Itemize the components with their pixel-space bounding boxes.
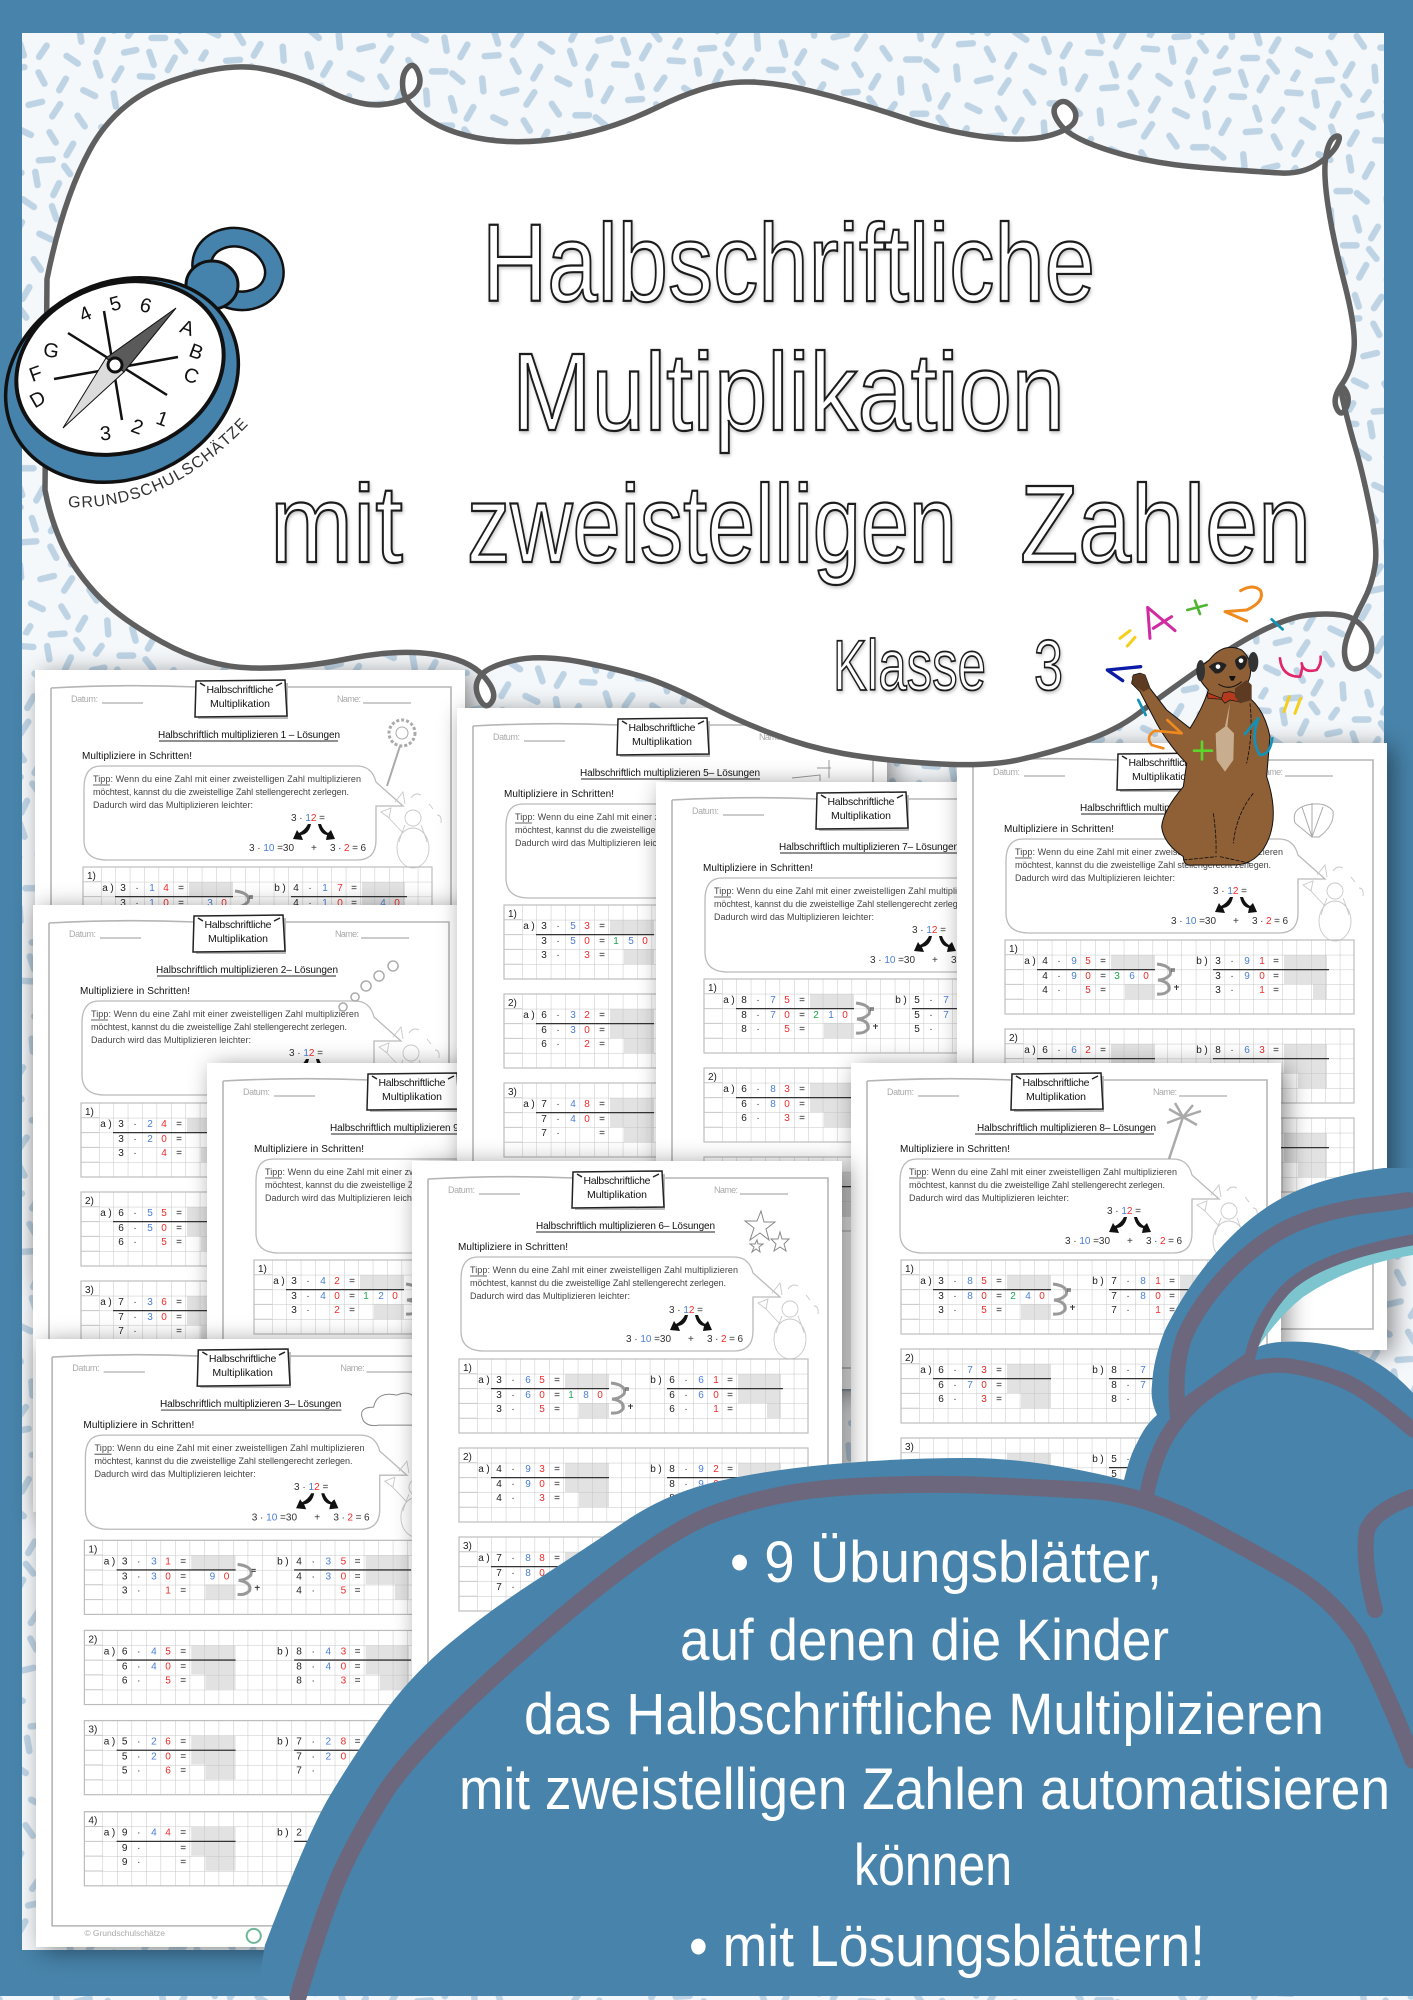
worksheet 6 title and tip text: Tipp: Wenn du eine Zahl mit einer zweistelligen Zahl multiplizieren [470,1265,738,1275]
worksheet 6 title and tip text: Halbschriftlich multiplizieren 6– Lösungen [536,1221,715,1232]
exercise block 1: a)3· 5 3 = [523,921,605,932]
worksheet 2 title and tip text [69,919,359,1059]
worksheet 6 title and tip text: Dadurch wird das Multiplizieren leichter: [470,1291,630,1301]
worksheet 3 title and tip text: Name: [340,1363,365,1373]
worksheet 6 title and tip text: + [688,1334,694,1345]
exercise block 1: a)3· 3 1 =b)4· 3 5 = [104,1556,361,1567]
worksheet 2 title and tip text: Tipp: Wenn du eine Zahl mit einer zweistelligen Zahl multiplizieren [91,1009,359,1019]
white title blob with hand-drawn grey frame [45,65,1376,765]
compass dial letters and numbers: A [177,316,198,341]
exercise block 2: 6· 7 0 =8· 7 [938,1380,1146,1391]
exercise block 1: 3· 3 = [541,950,605,961]
exercise block 3 [504,1083,853,1157]
exercise block 2 [459,1448,808,1522]
worksheet 7 title and tip text: möchtest, kannst du die zweistellige Zahl stellengerecht zerlegen. [714,899,970,909]
exercise block 1: 1) [258,1264,267,1275]
worksheet 1 title and tip text: Datum: [71,694,98,704]
exercise block 3: a)7· 8 8 = [478,1553,560,1564]
worksheet 3 title and tip text: 3 · 2 = 6 [333,1512,370,1523]
exercise block 3 [704,1157,1053,1231]
exercise block 1: 1) [87,871,96,882]
exercise block 2 [504,994,853,1068]
exercise block 2: 6· 3 =8· [938,1394,1130,1405]
worksheet 1 title and tip text: 3 · 10 =30 [249,843,294,854]
worksheet 9 title and tip text: Multiplikation [382,1091,442,1103]
worksheet 2 title and tip text: Datum: [69,929,96,939]
banner text: • 9 Übungsblätter, [730,1530,1162,1595]
exercise block 3: 7· 8 0 [496,1568,545,1579]
exercise block 1: 3· 4 = [118,1148,182,1159]
worksheet page 3 [36,1339,469,1947]
worksheet 7 title and tip text: Dadurch wird das Multiplizieren leichter: [714,912,874,922]
exercise block 2: 6· 5 = [118,1237,182,1248]
compass dial letters and numbers: 2 [128,415,146,440]
worksheet 9 title and tip text: Dadurch wird das Multiplizieren leichter: [265,1193,425,1203]
exercise block 1: 3· 8 0 = 2 4 0 7· 8 0 = [938,1291,1175,1302]
worksheet 7 title and tip text: Tipp: Wenn du eine Zahl mit einer zweistelligen Zahl multiplizieren [714,886,982,896]
exercise block 3: 3) [88,1725,97,1736]
worksheet 9 title and tip text [243,1077,533,1203]
decoration: stars [745,1211,789,1252]
worksheet 4 title and tip text: Multiplikation [1132,771,1192,783]
exercise block 1 [84,1540,436,1614]
worksheet 4 title and tip text: + [1233,916,1239,927]
worksheet 8 title and tip text: Multipliziere in Schritten! [900,1144,1010,1155]
exercise block 3: 7· 4 0 = [541,1114,605,1125]
worksheet 6 title and tip text: möchtest, kannst du die zweistellige Zahl stellengerecht zerlegen. [470,1278,726,1288]
worksheet 7 title and tip text: 3 · 10 =30 [870,955,915,966]
worksheet 3 title and tip text: Halbschriftlich multiplizieren 3– Lösungen [160,1399,341,1410]
worksheet 5 title and tip text: Datum: [493,732,520,742]
worksheet 3 title and tip text: Halbschriftliche [209,1353,277,1365]
class label Klasse 3: Klasse [833,627,986,706]
worksheet 5 title and tip text: Name: [759,732,783,742]
exercise block 1: 3· 1 0 = 3 0 4· 1 0 = 4 0 [120,898,400,909]
symbols over meerkat [1149,718,1272,759]
worksheet 7 title and tip text: Multipliziere in Schritten! [703,863,813,874]
exercise block 2: a)6· 5 5 = [100,1208,182,1219]
exercise block 3: 3) [708,1161,717,1172]
worksheet 4 title and tip text: 3 · 2 = 6 [1252,916,1288,927]
exercise block 1: 3· 1 =4· 5 = [122,1585,361,1596]
exercise block 3: b)5· [1092,1454,1130,1465]
worksheet 5 title and tip text: Halbschriftlich multiplizieren 5– Lösungen [580,768,760,779]
exercise block 2: 2) [1009,1033,1018,1044]
exercise block 4: 9·= [122,1843,186,1854]
worksheet 9 title and tip text: Tipp: Wenn du eine Zahl mit einer zweistelligen Zahl multiplizieren [265,1167,533,1177]
worksheet 1 title and tip text: 3 · 2 = 6 [330,843,366,854]
worksheet page 2 [33,905,463,1512]
worksheet 1 title and tip text: möchtest, kannst du die zweistellige Zahl stellengerecht zerlegen. [93,787,349,797]
worksheet 7 title and tip text: Halbschriftlich multiplizieren 7– Lösungen [779,842,959,853]
worksheet 2 title and tip text: Multipliziere in Schritten! [80,986,190,997]
blue rounded banner shape (compass silhouette) [256,1168,1413,1997]
worksheet 4 title and tip text: 3 · 12 = [1213,886,1247,897]
worksheet 8 title and tip text: Tipp: Wenn du eine Zahl mit einer zweistelligen Zahl multiplizieren [909,1167,1177,1177]
exercise block 3 [84,1721,436,1795]
worksheet 3 title and tip text: Multipliziere in Schritten! [83,1420,194,1431]
main title outlined lettering: mit [270,463,403,586]
worksheet 5 title and tip text [493,722,783,848]
worksheet page 7 [656,782,1086,1389]
worksheet 7 title and tip text: 3 · 2 = 6 [951,955,987,966]
worksheet 2 title and tip text: Multiplikation [208,933,268,945]
compass dial letters and numbers: C [180,364,202,389]
exercise block 1 [83,867,432,941]
compass dial letters and numbers: G [41,339,61,363]
worksheet 5 title and tip text: Multiplikation [632,736,692,748]
worksheet 4 title and tip text: Name: [1259,767,1283,777]
banner grey-purple contour bands [298,1200,1413,1997]
worksheet 5 title and tip text: Halbschriftliche [628,722,696,734]
illustration: meerkat with math symbols [1107,587,1321,865]
worksheet 4 title and tip text: möchtest, kannst du die zweistellige Zahl stellengerecht zerlegen. [1015,860,1271,870]
exercise block 2: 6· 5 =8· 3 = [122,1676,361,1687]
banner highlight crescent [1258,1243,1413,1347]
exercise block 1: 3· 5 =6· 1 = [496,1404,733,1415]
compass dial letters and numbers: B [186,340,206,365]
main title outlined lettering: Zahlen [1020,463,1311,586]
worksheet 3 title and tip text: + [314,1512,320,1523]
exercise block 1: 8· 7 0 = 2 1 0 5· 7 0 = [741,1010,978,1021]
exercise block 1: 3· 4 0 = 1 2 0 [291,1291,398,1302]
compass dial letters and numbers [26,292,206,445]
worksheet 4 title and tip text: Dadurch wird das Multiplizieren leichter: [1015,873,1175,883]
brand text Grundschulschätze: GRUNDSCHULSCHÄTZE [68,418,248,508]
exercise block 3: 3) [508,1087,517,1098]
compass dial letters and numbers: 1 [153,407,171,432]
worksheet page 6 [412,1161,842,1768]
exercise block 1: 4· 5 =3· 1 = [1042,985,1279,996]
exercise block 2: 2) [463,1452,472,1463]
worksheet 8 title and tip text: Halbschriftliche [1022,1077,1090,1089]
exercise block 2 [84,1630,436,1705]
exercise block 1: 1) [708,983,717,994]
worksheet 3 title and tip text: möchtest, kannst du die zweistellige Zahl stellengerecht zerlegen. [94,1456,353,1466]
exercise block 1: 3· 5 =7· 1 = [938,1305,1175,1316]
worksheet 9 title and tip text: Datum: [243,1087,270,1097]
exercise block 2: 2) [85,1196,94,1207]
compass dial letters and numbers: 5 [107,292,124,316]
worksheet 1 title and tip text [71,684,366,854]
worksheet 2 title and tip text: 3 · 12 = [289,1048,323,1059]
exercise block 3: a)5· 2 6 =b)7· 2 8 = [104,1737,361,1748]
exercise block 1 [254,1260,603,1334]
exercise block 3: 3) [463,1541,472,1552]
worksheet 4 title and tip text [993,757,1288,927]
worksheet 1 title and tip text: Halbschriftlich multiplizieren 1 – Lösungen [158,730,340,741]
worksheet 6 title and tip text: Halbschriftliche [584,1175,651,1187]
exercise block 2: 6· 5 0 = [118,1223,182,1234]
exercise block 2: a)6· 3 2 = [523,1010,605,1021]
worksheet 6 title and tip text: 3 · 10 =30 [626,1334,671,1345]
worksheet 1 title and tip text: 3 · 12 = [291,813,325,824]
worksheet 2 title and tip text: Halbschriftlich multiplizieren 2– Lösungen [156,965,338,976]
main title outlined lettering [270,202,1311,586]
icon: compass logo [4,226,285,508]
worksheet page 1 [35,670,465,1277]
worksheet 2 title and tip text: Dadurch wird das Multiplizieren leichter: [91,1035,251,1045]
worksheet 4 title and tip text: Datum: [993,767,1020,777]
worksheet 4 title and tip text: 3 · 10 =30 [1171,916,1216,927]
exercise block 2: a)4· 9 3 =b)8· 9 2 = [478,1464,733,1475]
worksheet 5 title and tip text: Dadurch wird das Multiplizieren leichter: [515,838,675,848]
exercise block 2: 2) [708,1072,717,1083]
worksheet 9 title and tip text: möchtest, kannst du die zweistellige Zahl stellengerecht zerlegen. [265,1180,521,1190]
worksheet 2 title and tip text: möchtest, kannst du die zweistellige Zahl stellengerecht zerlegen. [91,1022,347,1032]
compass dial letters and numbers: 3 [99,423,112,445]
worksheet 4 title and tip text: Halbschriftlich multiplizieren 4– Lösungen [1080,803,1260,814]
footer: © Grundschulschätze [84,1928,165,1938]
decoration: palm tree [1167,1103,1201,1159]
banner text: das Halbschriftliche Multiplizieren [524,1682,1324,1747]
exercise block 1: a)3· 8 5 =b)7· 8 1 = [920,1276,1175,1287]
exercise block 1: a)8· 7 5 =b)5· 7 6 = [723,995,978,1006]
exercise block 1: a)3· 6 5 =b)6· 6 1 = [478,1375,733,1386]
exercise block 3: 3) [905,1442,914,1453]
worksheet 6 title and tip text: Datum: [448,1185,475,1195]
exercise block 1: 4· 9 0 = 3 6 0 3· 9 0 = [1042,971,1279,982]
pattern strip at bottom and in compass hole [0,1240,1413,2000]
exercise block 4: 9·= [122,1857,186,1868]
exercise block 1: 3· 3 0 = 9 0 4· 3 0 = [122,1571,361,1582]
exercise block 1: 3· 2 = [291,1305,355,1316]
worksheet 7 title and tip text: Datum: [692,806,719,816]
worksheet 7 title and tip text: Halbschriftliche [828,796,895,808]
decoration: shell [1294,803,1333,837]
exercise block 2: 2) [905,1353,914,1364]
compass dial letters and numbers: 6 [137,294,154,318]
worksheet 7 title and tip text: + [932,955,938,966]
exercise block 3: 5 [1111,1469,1117,1480]
worksheet 8 title and tip text: Dadurch wird das Multiplizieren leichter: [909,1193,1069,1203]
worksheet 3 title and tip text: 3 · 12 = [294,1482,328,1493]
worksheet 1 title and tip text: Tipp: Wenn du eine Zahl mit einer zweistelligen Zahl multiplizieren [93,774,361,784]
exercise block 3: 7· [496,1582,515,1593]
math symbols [1107,587,1321,715]
worksheet 9 title and tip text: Halbschriftliche [378,1077,446,1089]
worksheet 4 title and tip text: Tipp: Wenn du eine Zahl mit einer zweistelligen Zahl multiplizieren [1015,847,1283,857]
exercise block 3 [81,1281,430,1355]
exercise block 2: 2) [508,998,517,1009]
main title outlined lettering: Halbschriftliche [482,202,1095,325]
exercise block 1: 1) [1009,944,1018,955]
exercise block 1 [459,1359,808,1433]
decoration: ship [792,760,831,781]
banner text: können [854,1833,1012,1898]
exercise block 1: 1) [905,1264,914,1275]
exercise block 1: a)3· 2 4 = [100,1119,182,1130]
banner text: • mit Lösungsblättern! [689,1914,1205,1979]
worksheet 1 title and tip text: Multipliziere in Schritten! [82,751,192,762]
exercise block 4 [84,1812,436,1886]
worksheet 7 title and tip text [692,796,987,966]
worksheet 6 title and tip text [448,1175,743,1345]
exercise block 3 [1005,1118,1354,1192]
compass dial letters and numbers: D [26,387,50,413]
exercise block 2 [704,1068,1053,1142]
exercise block 1: 3· 5 0 = 1 5 0 [541,936,648,947]
worksheet 8 title and tip text: 3 · 10 =30 [1065,1236,1110,1247]
worksheet 5 title and tip text: Tipp: Wenn du eine Zahl mit einer zweistelligen Zahl multiplizieren [515,812,783,822]
worksheet page 9 [207,1063,637,1670]
worksheet 8 title and tip text: + [1127,1236,1133,1247]
exercise block 2: 6· 4 0 =8· 4 0 = [122,1662,361,1672]
exercise block 2 [901,1349,1250,1423]
exercise block 2: 6· 3 = [741,1113,805,1124]
worksheet 6 title and tip text: Multiplikation [587,1189,647,1201]
exercise block 3: a)7· 3 6 = [100,1297,182,1308]
exercise block 2 [81,1192,430,1266]
exercise block 1: a)3· 1 4 =b)4· 1 7 = [102,883,357,894]
worksheet 8 title and tip text: Datum: [887,1087,914,1097]
exercise block 1 [81,1103,430,1177]
exercise block 2: 6· 8 0 = [741,1099,805,1110]
worksheet 4 title and tip text: Multipliziere in Schritten! [1004,824,1114,835]
main title outlined lettering: zweistelligen [467,463,957,586]
exercise block 2 [1005,1029,1354,1103]
worksheet 5 title and tip text: Multipliziere in Schritten! [504,789,614,800]
worksheet 8 title and tip text: möchtest, kannst du die zweistellige Zahl stellengerecht zerlegen. [909,1180,1165,1190]
exercise block 3: 7·= [118,1326,182,1337]
worksheet 9 title and tip text: Halbschriftlich multiplizieren 9– Lösungen [330,1123,510,1134]
worksheet 1 title and tip text: Name: [337,694,361,704]
exercise block 1 [1005,940,1354,1014]
exercise block 1 [504,905,853,979]
worksheet 1 title and tip text: Dadurch wird das Multiplizieren leichter: [93,800,253,810]
compass dial letters and numbers: F [26,362,45,387]
exercise block 2: 2) [88,1634,97,1645]
worksheet 8 title and tip text: 3 · 2 = 6 [1146,1236,1182,1247]
worksheet 3 title and tip text: Tipp: Wenn du eine Zahl mit einer zweistelligen Zahl multiplizieren [94,1443,365,1453]
worksheet 2 title and tip text: Halbschriftliche [204,919,272,931]
exercise block 1 [704,979,1053,1053]
exercise block 1: 1) [88,1544,97,1555]
exercise block 1: 3· 2 0 = [118,1134,182,1145]
worksheet 3 title and tip text: Dadurch wird das Multiplizieren leichter: [94,1469,256,1479]
worksheet 9 title and tip text: Multipliziere in Schritten! [254,1144,364,1155]
exercise block 3: 5· 2 0 =7· 2 0 [122,1752,347,1763]
worksheet 7 title and tip text: Multiplikation [831,810,891,822]
meerkat body [1132,647,1273,865]
worksheet 3 title and tip text [72,1353,370,1523]
exercise block 3 [901,1438,1250,1512]
worksheet 8 title and tip text: 3 · 12 = [1107,1206,1141,1217]
exercise block 2: 6· 2 = [541,1039,605,1050]
worksheet 6 title and tip text: Multipliziere in Schritten! [458,1242,568,1253]
worksheet 1 title and tip text: Multiplikation [210,698,270,710]
worksheet 5 title and tip text: möchtest, kannst du die zweistellige Zahl stellengerecht zerlegen. [515,825,771,835]
exercise block 1 [901,1260,1250,1334]
worksheet page 4 [957,743,1387,1350]
exercise block 1: 3· 6 0 = 1 8 0 6· 6 0 = [496,1390,733,1401]
worksheet 3 title and tip text: Multiplikation [212,1367,273,1379]
exercise block 1: a)4· 9 5 =b)3· 9 1 = [1024,956,1279,967]
exercise block 4: 4) [88,1816,97,1827]
exercise block 2: 4· 9 0 =8· 9 0 = [496,1479,733,1490]
worksheet page 8 [851,1063,1281,1670]
decoration: flower [387,720,415,786]
worksheet 2 title and tip text: Name: [335,929,359,939]
exercise block 1: 1) [508,909,517,920]
exercise block 3: 7· 3 0 = [118,1312,182,1323]
class label Klasse 3: 3 [1034,627,1063,706]
banner text: auf denen die Kinder [680,1608,1169,1673]
exercise block 3 [459,1537,808,1611]
exercise block 2: a)6· 4 5 =b)8· 4 3 = [104,1646,361,1657]
worksheet 8 title and tip text [887,1077,1182,1247]
main title outlined lettering: Multiplikation [512,331,1065,454]
exercise block 3: 7·= [541,1128,605,1139]
compass dial letters and numbers: 4 [76,302,95,327]
worksheet 4 title and tip text: Halbschriftliche [1128,757,1196,769]
exercise block 2: 4· 3 =8· [496,1493,688,1504]
exercise block 3: 5· 6 =7· [122,1766,315,1777]
footer [84,1928,261,1943]
exercise block 2: a)6· 6 2 =b)8· 6 3 = [1024,1045,1279,1056]
worksheet page 5 [457,708,887,1315]
worksheet 3 title and tip text: Datum: [72,1363,100,1373]
exercise block 3: 3) [85,1285,94,1296]
worksheet 8 title and tip text: Halbschriftlich multiplizieren 8– Lösungen [977,1123,1156,1134]
decoration: bubbles [339,961,398,1011]
decoration: cloud [362,1393,417,1426]
worksheet 8 title and tip text: Multiplikation [1026,1091,1086,1103]
worksheet 1 title and tip text: + [311,843,317,854]
meerkat ears and eyes [1196,652,1258,687]
exercise block 1: 1) [85,1107,94,1118]
worksheet 8 title and tip text: Name: [1153,1087,1177,1097]
exercise block 1: 1) [463,1363,472,1374]
worksheet 7 title and tip text: 3 · 12 = [912,925,946,936]
worksheet 6 title and tip text: 3 · 2 = 6 [707,1334,743,1345]
exercise block 1: 8· 5 =5· 6 = [741,1024,978,1035]
exercise block 2: 6· 3 0 = [541,1025,605,1036]
exercise block 2: a)6· 8 3 = [723,1084,805,1095]
worksheet 6 title and tip text: Name: [714,1185,738,1195]
meerkat collar and belly [1132,673,1253,863]
worksheet 1 title and tip text: Halbschriftliche [206,684,274,696]
banner text [459,1530,1390,1979]
worksheet 3 title and tip text: 3 · 10 =30 [252,1512,297,1523]
exercise block 3: a)7· 4 8 = [523,1099,605,1110]
exercise block 4: a)9· 4 4 =b)2 [104,1828,302,1839]
exercise block 2: a)6· 7 3 =b)8· 7 [920,1365,1146,1376]
worksheet 6 title and tip text: 3 · 12 = [669,1305,703,1316]
exercise block 1: a)3· 4 2 = [273,1276,355,1287]
